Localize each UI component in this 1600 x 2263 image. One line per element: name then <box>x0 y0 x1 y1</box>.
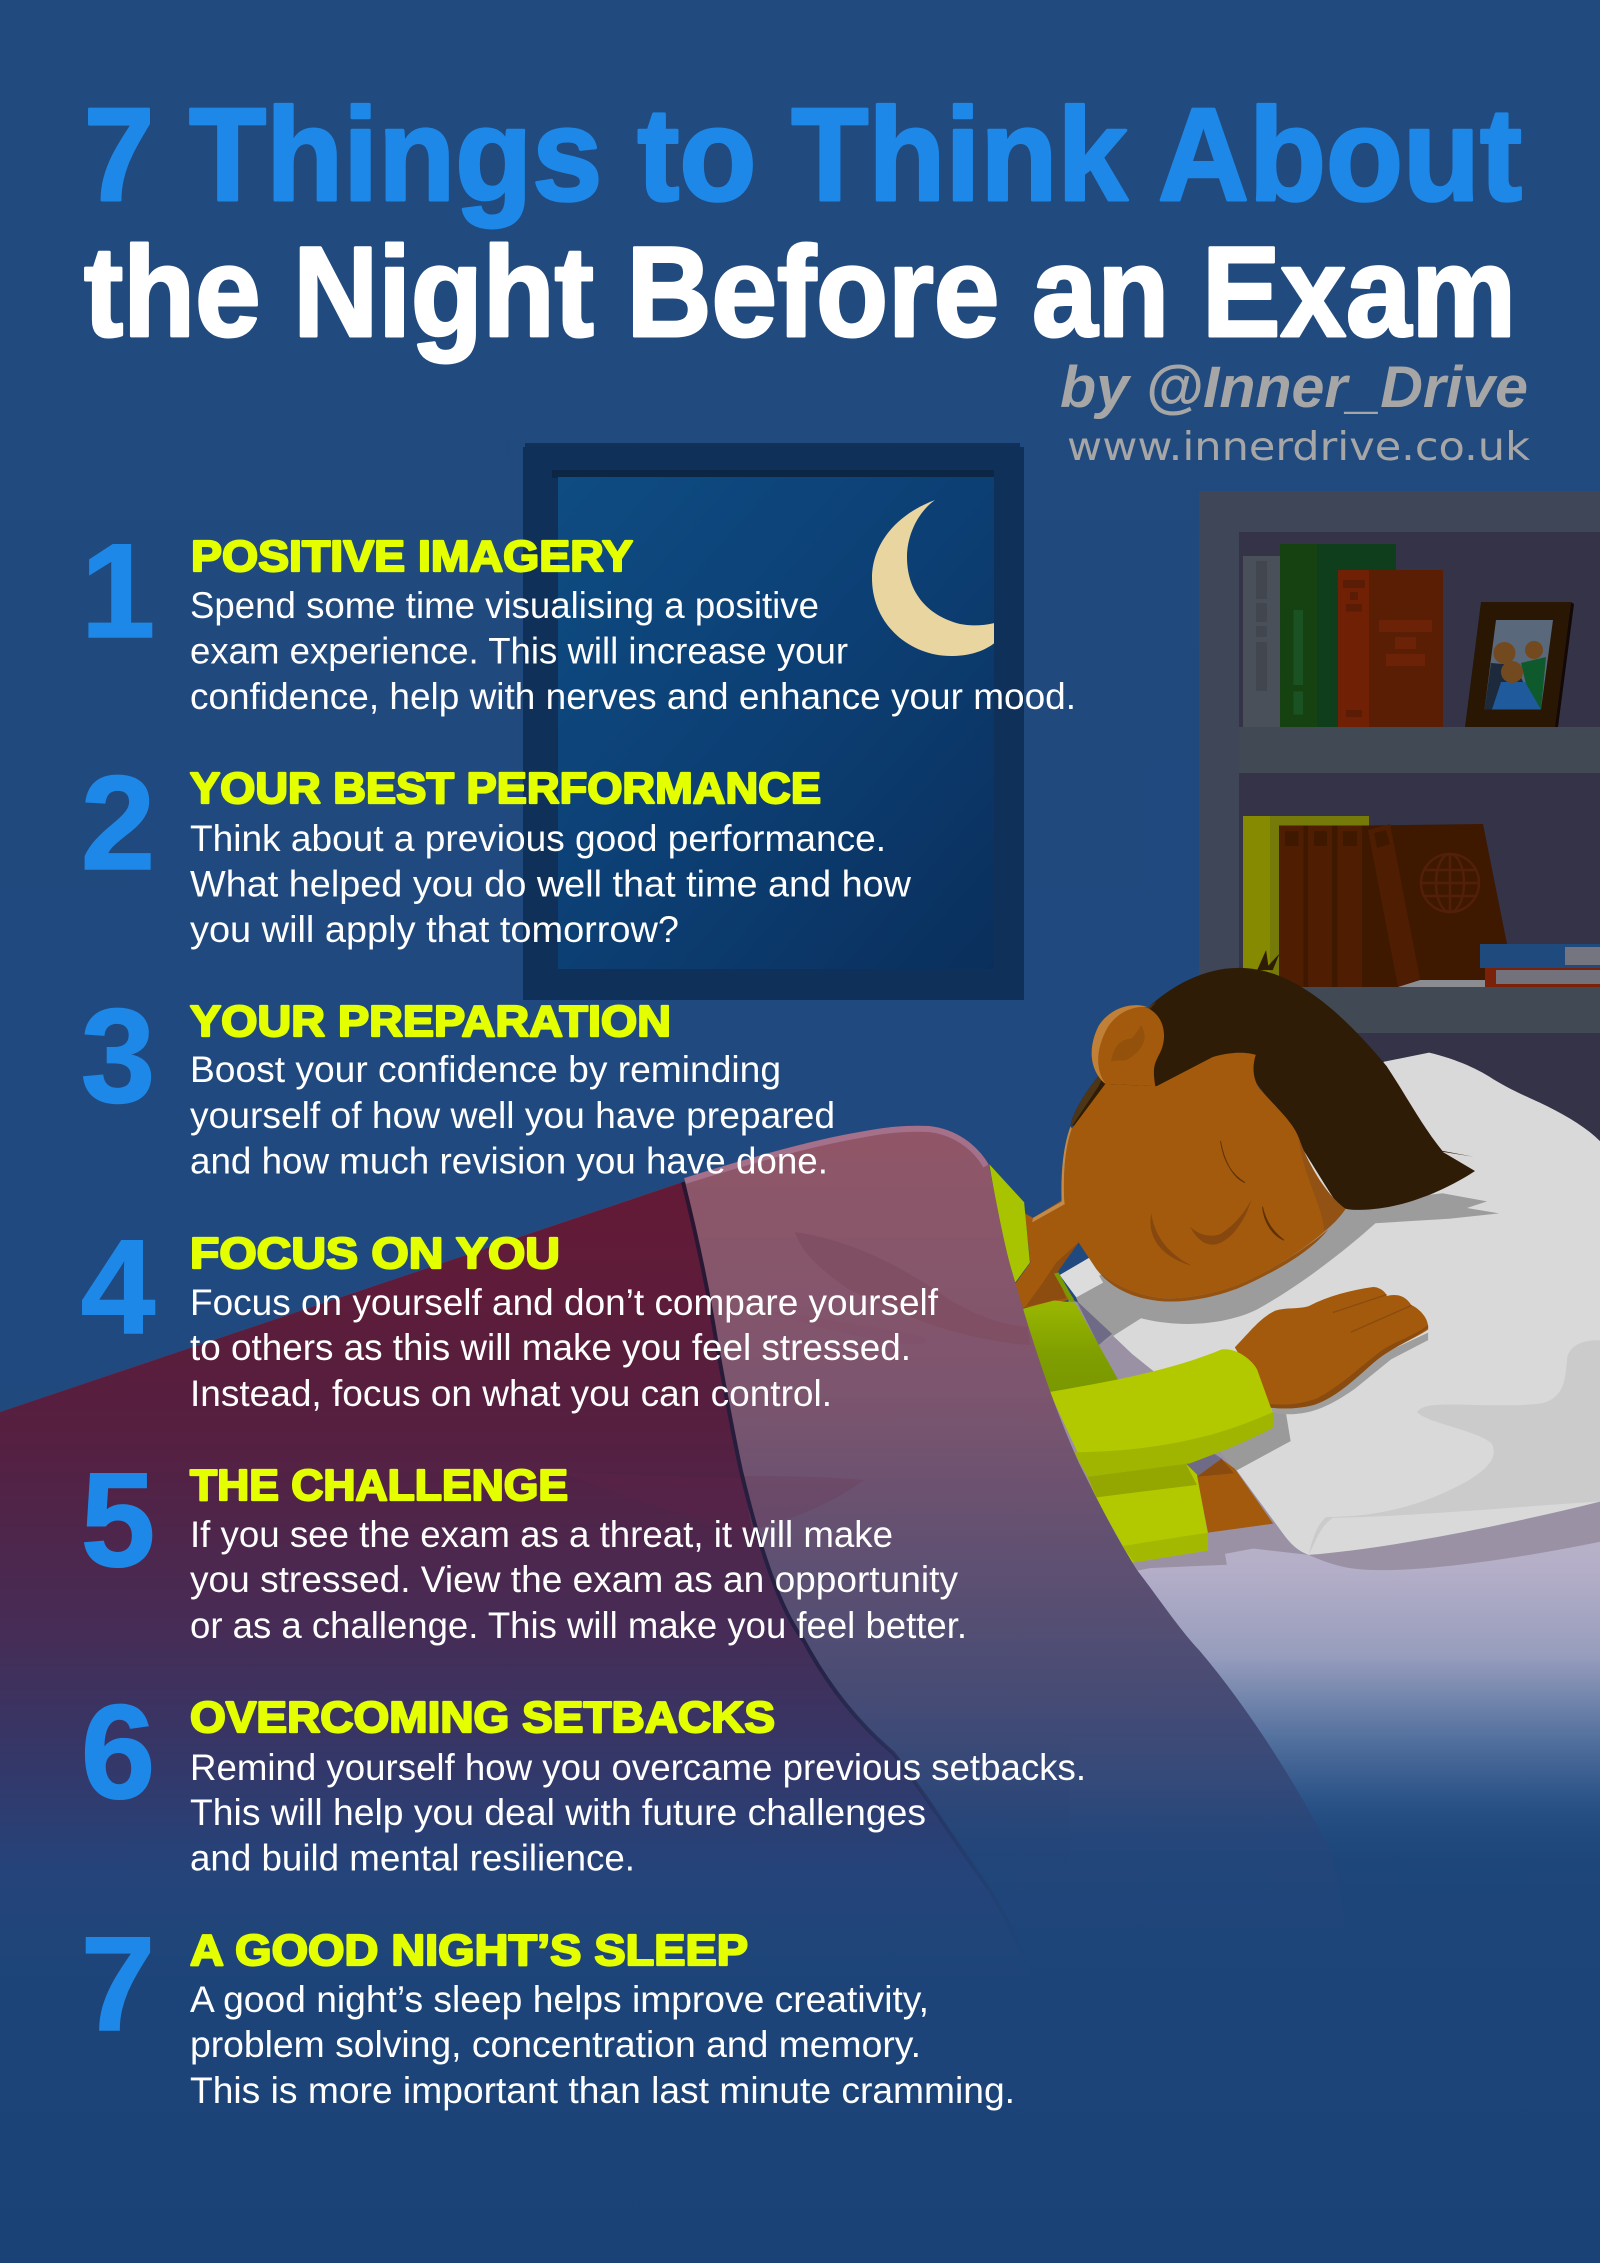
text 7: A good night’s sleep helps improve creativity, <box>190 1979 929 2020</box>
number 1: 1 <box>81 517 155 666</box>
smile <box>1190 1200 1251 1245</box>
text 2: Think about a previous good performance. <box>190 818 886 859</box>
face <box>1061 1053 1346 1302</box>
pillow shadow <box>1114 1486 1600 1570</box>
text 2 <box>190 818 911 950</box>
top shelf books <box>1243 544 1443 727</box>
text 4: to others as this will make you feel stressed. <box>190 1327 911 1368</box>
item 6 <box>81 1678 1086 1878</box>
white sheet corner <box>1060 1258 1103 1297</box>
lower arm <box>1197 1459 1273 1533</box>
text 7: problem solving, concentration and memory. <box>190 2024 921 2065</box>
blanket fold line <box>683 1182 1027 1968</box>
item 2 <box>81 749 911 950</box>
item 5 <box>81 1446 967 1646</box>
heading 7: A GOOD NIGHT’S SLEEP <box>190 1926 748 1975</box>
lower shelf books <box>1243 816 1600 987</box>
under-body shadow <box>1076 1300 1112 1345</box>
text 6 <box>190 1747 1086 1878</box>
cheek line <box>1150 1213 1192 1266</box>
text 4 <box>190 1282 939 1414</box>
icon: crescent moon <box>872 500 998 656</box>
title: 7 Things to Think About <box>84 81 1522 228</box>
text 6: Remind yourself how you overcame previous setbacks. <box>190 1747 1086 1788</box>
blanket dark fold <box>0 1182 1030 2120</box>
text 5 <box>190 1514 967 1646</box>
hand <box>1235 1287 1428 1414</box>
bed sheet <box>1070 1463 1600 1870</box>
text 1: exam experience. This will increase your <box>190 630 848 672</box>
icon: picture frame <box>1465 602 1574 727</box>
website: www.innerdrive.co.uk <box>1067 425 1530 470</box>
text 4: Focus on yourself and don’t compare yourself <box>190 1282 939 1323</box>
text 3: Boost your confidence by reminding <box>190 1049 781 1090</box>
title <box>84 81 1522 364</box>
text 6: This will help you deal with future challenges <box>190 1792 926 1833</box>
neck <box>1015 1198 1079 1308</box>
blanket rim highlight <box>685 1129 986 1181</box>
mattress shade behind body <box>1034 1298 1302 1575</box>
number 4: 4 <box>81 1213 155 1362</box>
blanket <box>0 1127 1350 2120</box>
item 4 <box>81 1213 939 1414</box>
byline: by @Inner_Drive <box>1060 355 1528 420</box>
ear <box>1092 1005 1164 1086</box>
text 1 <box>190 585 1076 717</box>
blanket light fold <box>0 1127 1350 2120</box>
text 7 <box>190 1979 1015 2111</box>
text 6: and build mental resilience. <box>190 1838 635 1878</box>
number 6: 6 <box>81 1678 155 1827</box>
near sleeve <box>1050 1349 1273 1477</box>
blanket creases <box>795 1232 1030 1345</box>
item 1 <box>81 517 1076 717</box>
text 5: or as a challenge. This will make you feel better. <box>190 1605 967 1646</box>
far sleeve <box>1088 1463 1208 1563</box>
heading 4: FOCUS ON YOU <box>190 1229 560 1278</box>
arm shadow <box>1219 1412 1291 1471</box>
text 3: yourself of how well you have prepared <box>190 1095 835 1136</box>
text 5: you stressed. View the exam as an opportunity <box>190 1559 958 1600</box>
closed eyes <box>1221 1141 1284 1240</box>
number 7: 7 <box>81 1910 155 2059</box>
item 7 <box>81 1910 1015 2111</box>
item 3 <box>81 982 835 1182</box>
text 2: What helped you do well that time and how <box>190 864 911 904</box>
collar <box>989 1164 1030 1283</box>
window glass <box>558 477 994 969</box>
icon: globe <box>1421 854 1479 912</box>
bed and pillow <box>1034 1053 1600 1870</box>
heading 3: YOUR PREPARATION <box>190 997 671 1046</box>
text 1: confidence, help with nerves and enhance your mood. <box>190 676 1076 717</box>
heading 2: YOUR BEST PERFORMANCE <box>190 764 821 813</box>
head shadow <box>1076 1193 1499 1345</box>
number 3: 3 <box>81 982 155 1131</box>
pillow creases <box>1308 1340 1600 1555</box>
heading 1: POSITIVE IMAGERY <box>191 532 633 581</box>
text 7: This is more important than last minute cramming. <box>190 2070 1015 2111</box>
text 2: you will apply that tomorrow? <box>190 909 679 950</box>
number 5: 5 <box>81 1446 155 1595</box>
pillow <box>1060 1053 1600 1555</box>
title line 2: the Night Before an Exam <box>84 221 1516 364</box>
number 2: 2 <box>81 749 155 898</box>
sleeping student <box>989 950 1499 1563</box>
text 4: Instead, focus on what you can control. <box>190 1373 832 1414</box>
text 1: Spend some time visualising a positive <box>190 585 819 626</box>
heading 5: THE CHALLENGE <box>190 1461 568 1510</box>
text 5: If you see the exam as a threat, it will make <box>190 1514 893 1555</box>
green shoulder <box>1021 1300 1119 1392</box>
text 3: and how much revision you have done. <box>190 1140 828 1182</box>
bookshelf <box>1199 491 1600 1163</box>
window <box>523 443 1024 1000</box>
hair <box>1071 950 1475 1210</box>
text 3 <box>190 1049 835 1182</box>
heading 6: OVERCOMING SETBACKS <box>190 1693 775 1742</box>
